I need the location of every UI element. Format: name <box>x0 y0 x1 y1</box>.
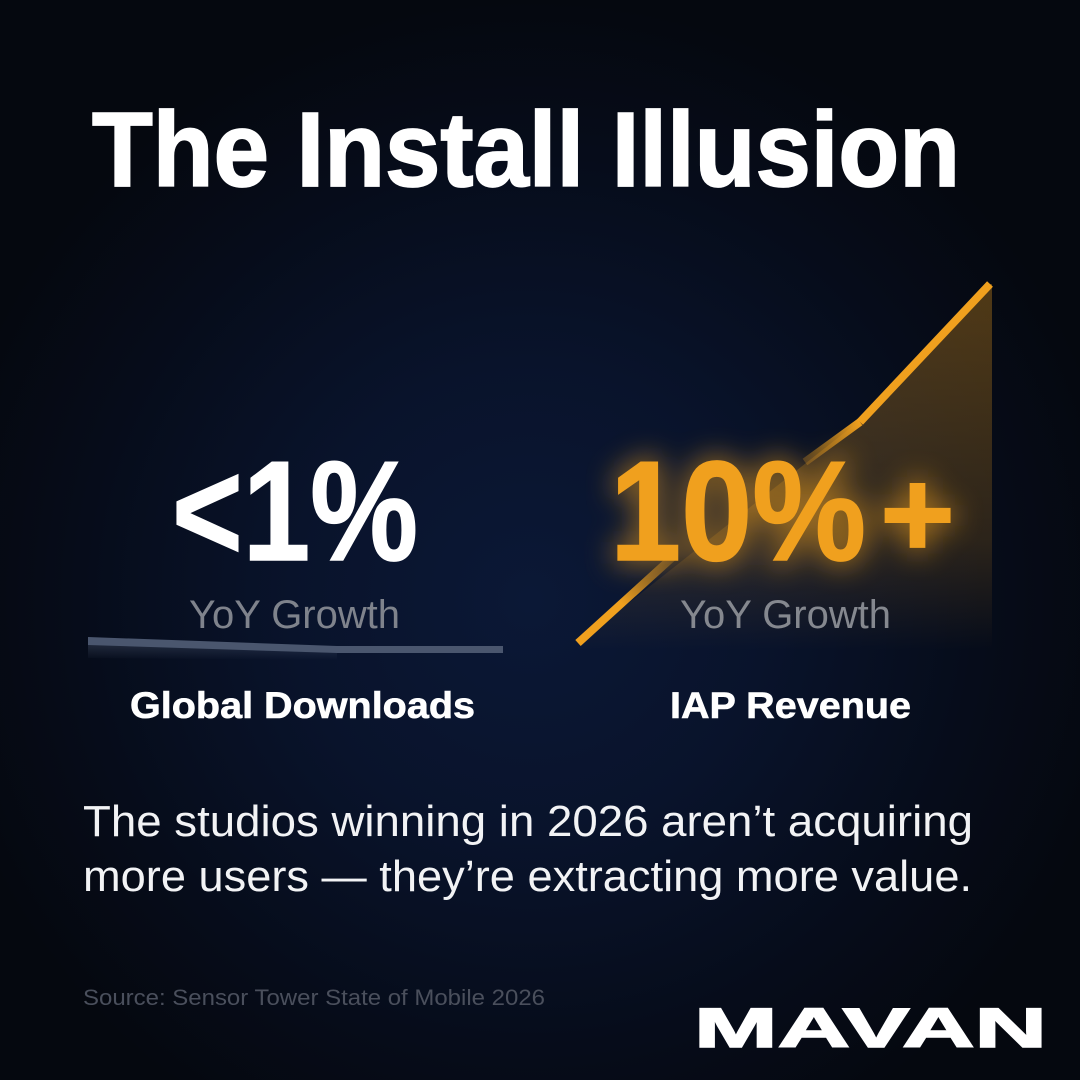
glow behind stat: + <box>880 445 955 584</box>
takeaway text: more users — they’re extracting more value. <box>83 852 972 901</box>
logo: mavan wordmark: MAVAN <box>694 996 1047 1059</box>
label: yoy growth: YoY Growth <box>189 593 400 637</box>
label: yoy growth: YoY Growth <box>680 593 891 637</box>
takeaway text: The studios winning in 2026 aren’t acquiring <box>83 797 973 846</box>
title: The Install Illusion <box>92 91 960 209</box>
rising revenue area chart <box>578 284 992 650</box>
heading: iap revenue: IAP Revenue <box>670 685 911 726</box>
source note: Source: Sensor Tower State of Mobile 2026 <box>83 985 545 1010</box>
stat: less than 1 percent: <1% <box>172 432 418 591</box>
glow behind stat: 10% <box>610 432 866 591</box>
stat: 10 percent plus: 10% <box>610 432 866 591</box>
panel: iap revenue <box>578 284 992 726</box>
flat downloads line chart <box>88 637 503 660</box>
takeaway text <box>83 797 973 901</box>
panel: global downloads <box>88 432 503 726</box>
stat: 10 percent plus: + <box>880 445 955 584</box>
heading: global downloads: Global Downloads <box>130 685 475 726</box>
